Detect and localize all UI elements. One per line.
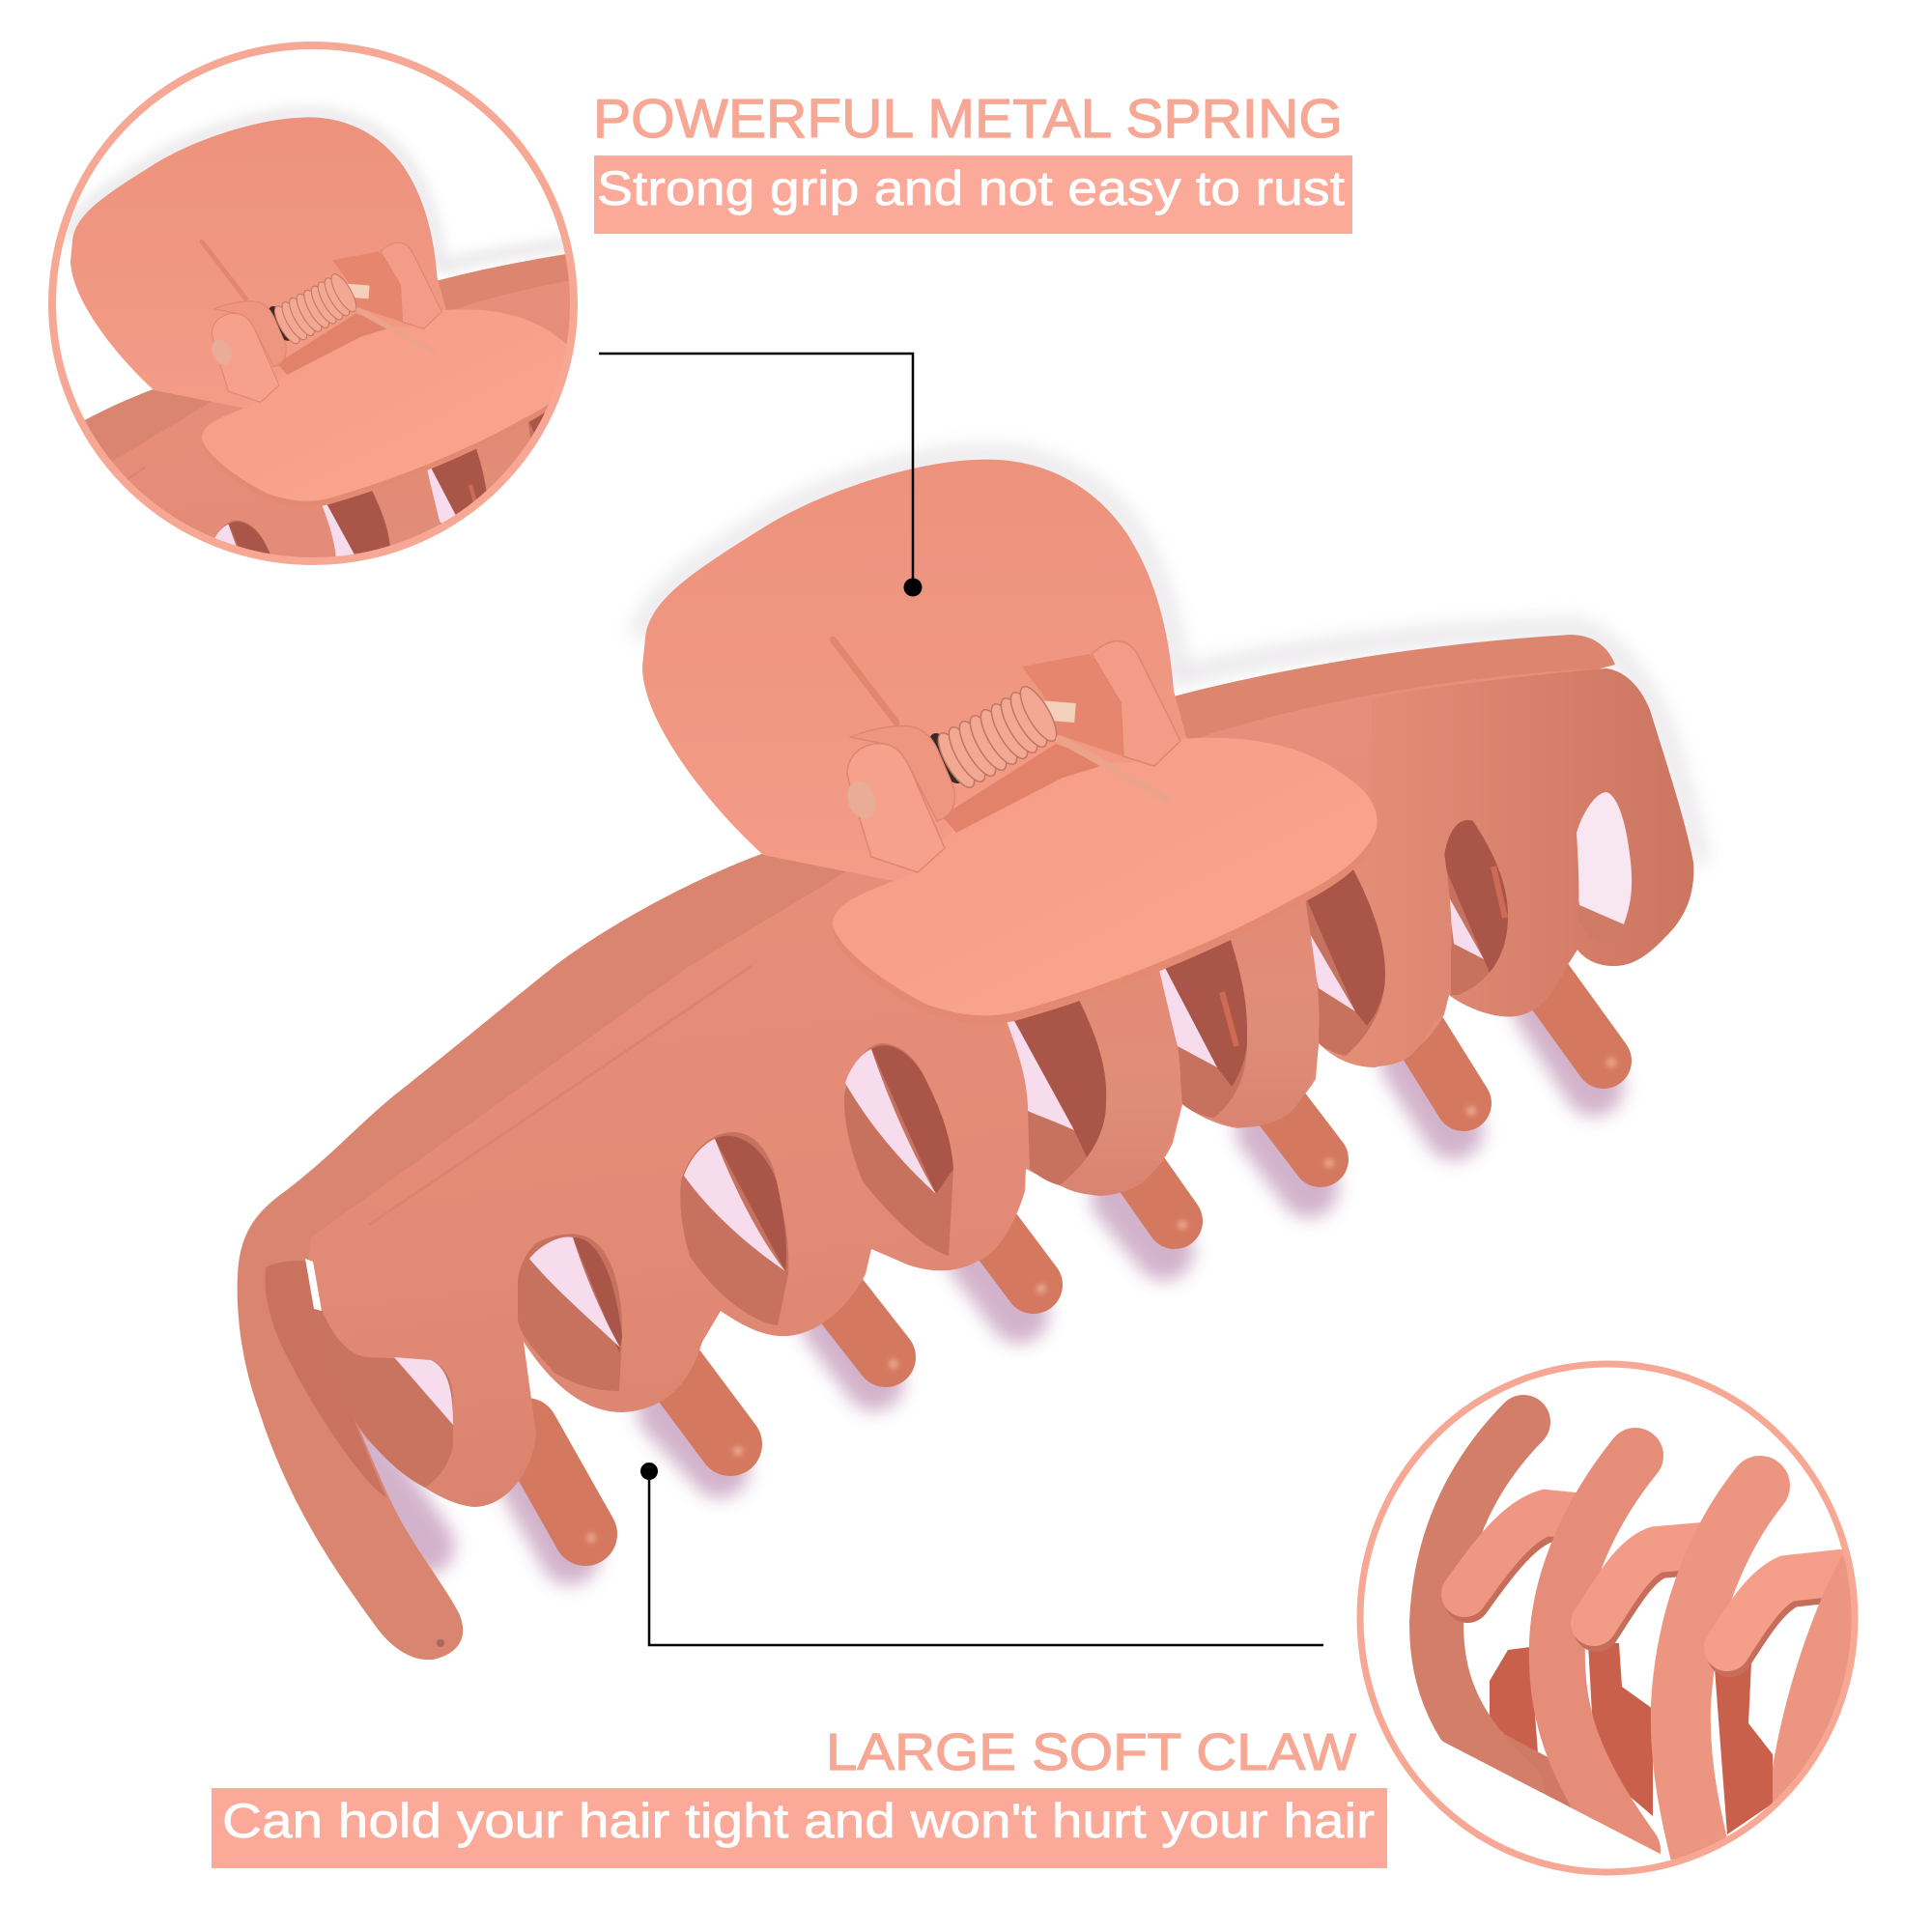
ridge line on front jaw (369, 966, 752, 1225)
hole 6 (1158, 923, 1247, 1119)
hole 3 (680, 1132, 788, 1325)
callout line: soft claw (640, 1463, 1323, 1645)
hole 7 (1303, 855, 1385, 1056)
bottom plate (833, 738, 1378, 1015)
arm 2 (1594, 1546, 1705, 1629)
right jaw shading (1372, 668, 1693, 1063)
tooth end dot (437, 1639, 444, 1647)
callout dot (640, 1463, 658, 1480)
soft shadows (319, 455, 1700, 1555)
heading: powerful metal spring: POWERFUL METAL SPRING (593, 88, 1343, 150)
front lobe 7 (1346, 821, 1452, 1066)
front lobe 8 (1459, 800, 1578, 1015)
tooth tip highlights (586, 1058, 1616, 1543)
front jaw body with lobes (308, 668, 1693, 1507)
arm 3 (1727, 1573, 1843, 1654)
inner walls (1490, 1647, 1538, 1752)
hole 4 (844, 1043, 953, 1256)
top handle (642, 460, 1188, 884)
arc 3 (1681, 1486, 1760, 1893)
inner face of back tooth (265, 1261, 386, 1497)
callout line: metal spring (599, 354, 922, 597)
spring mechanism (842, 641, 1180, 872)
hole 5 (1003, 980, 1106, 1185)
right bracket (1092, 641, 1180, 766)
banner: can hold your hair (212, 1788, 1387, 1868)
callout dot (904, 578, 922, 597)
base band (1449, 1724, 1604, 1806)
back long tooth and spine (238, 850, 927, 1660)
front lobe 5 (1060, 963, 1180, 1195)
shadow below spring (942, 744, 1111, 833)
bottom plate rim (833, 747, 1378, 1024)
inset circle: metal spring close-up (48, 42, 578, 565)
main product: claw hair clip (238, 455, 1700, 1660)
left bracket (847, 744, 945, 872)
right jaw back strip (1159, 635, 1615, 773)
banner text: Can hold your hair tight and won't hurt your hair (222, 1794, 1375, 1848)
dark spring core (922, 727, 972, 789)
inset ring (52, 45, 574, 561)
hole 1 (305, 1259, 453, 1488)
pin head (842, 777, 881, 823)
arc 1 (1436, 1422, 1523, 1787)
enlarged clip detail (0, 114, 801, 946)
arm 1 (1464, 1513, 1587, 1600)
spring lever lower arm (1060, 739, 1167, 799)
hole 8 (1443, 820, 1508, 995)
hole 9 (1573, 792, 1632, 945)
inset ring (1360, 1364, 1855, 1872)
spring coils (931, 682, 1064, 792)
spring lever upper arm (833, 639, 896, 723)
hole 2 (518, 1234, 622, 1391)
front lobe 6 (1212, 884, 1320, 1127)
arc 2 (1557, 1456, 1635, 1850)
banner: strong grip (594, 156, 1352, 234)
inset circle: soft claw close-up (1360, 1364, 1884, 1893)
claw tooth tips (526, 980, 1604, 1534)
right block (1022, 654, 1123, 756)
arc 4 (1773, 1557, 1851, 1803)
left block (850, 726, 954, 821)
axle (1038, 710, 1075, 713)
heading: large soft claw: LARGE SOFT CLAW (826, 1723, 1356, 1781)
banner text: Strong grip and not easy to rust (597, 161, 1345, 215)
claw side view (1436, 1422, 1884, 1893)
